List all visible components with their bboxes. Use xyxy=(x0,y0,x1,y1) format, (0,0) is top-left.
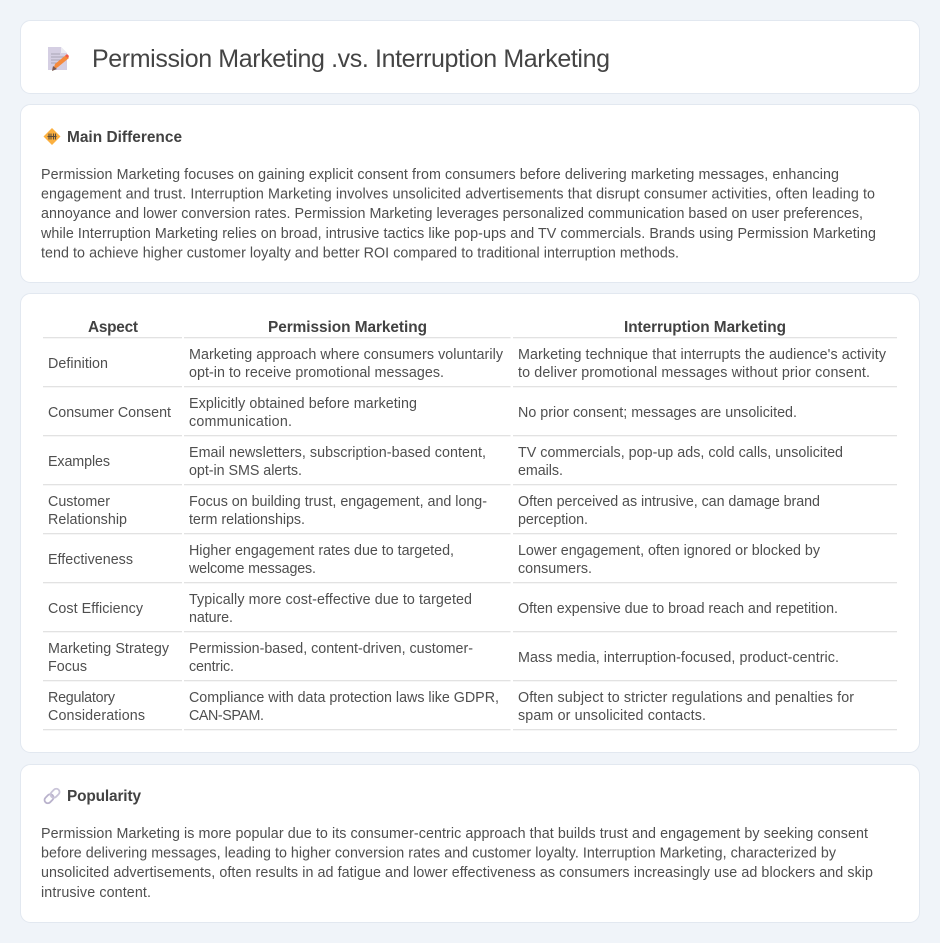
panel: popularity xyxy=(20,764,920,922)
table row: marketing strategy focus: Permission-based, content-driven, customer- xyxy=(189,641,473,657)
text block: main difference body: Permission Marketing focuses on gaining explicit consent from consumers before delivering marketing messages, enhancing xyxy=(41,167,839,183)
table row: effectiveness: welcome messages. xyxy=(188,561,316,577)
panel: comparison table xyxy=(20,294,920,752)
icon: chain link xyxy=(43,787,61,805)
table row: consumer consent xyxy=(43,396,897,436)
text block: main difference body xyxy=(40,167,876,261)
table row: marketing strategy focus: Marketing Strategy xyxy=(48,641,170,657)
text block: popularity body: unsolicited advertisements, often results in ad fatigue and lower effectiveness as consumers increasingly use ad blockers and skip xyxy=(41,865,873,881)
table row: effectiveness: Effectiveness xyxy=(48,552,133,568)
table row: customer relationship xyxy=(43,494,897,534)
table header row: Aspect xyxy=(88,319,138,336)
table row: regulatory considerations: Often subject to stricter regulations and penalties for xyxy=(518,690,854,706)
table row: consumer consent: Explicitly obtained before marketing xyxy=(189,396,417,412)
table header row: Interruption Marketing xyxy=(624,319,786,336)
table row: definition xyxy=(43,347,897,387)
text block: popularity body xyxy=(41,826,873,901)
table row: cost efficiency xyxy=(43,592,897,632)
table row: customer relationship: perception. xyxy=(518,512,588,528)
table row: examples: Examples xyxy=(48,454,110,470)
table row: definition: Definition xyxy=(48,356,108,372)
table row: definition: Marketing approach where consumers voluntarily xyxy=(189,347,504,363)
table header row: Permission Marketing xyxy=(268,319,427,336)
table row: regulatory considerations xyxy=(43,690,897,730)
table row: customer relationship: Customer xyxy=(48,494,110,510)
table row: customer relationship: Relationship xyxy=(48,512,127,528)
panel: title header xyxy=(20,20,920,94)
table row: examples: opt-in SMS alerts. xyxy=(189,463,302,479)
table row: regulatory considerations: CAN-SPAM. xyxy=(189,708,264,724)
text block: main difference body: annoyance and lower conversion rates. Permission Marketing leverages personalized communication based on user preferences, xyxy=(41,206,863,222)
table row: cost efficiency: Cost Efficiency xyxy=(48,601,144,617)
table row: definition: Marketing technique that interrupts the audience's activity xyxy=(518,347,887,363)
table row: consumer consent: No prior consent; messages are unsolicited. xyxy=(518,405,797,421)
table row: consumer consent: communication. xyxy=(189,414,292,430)
text block: main difference body: tend to achieve higher customer loyalty and better ROI compared to traditional interruption methods. xyxy=(41,245,679,261)
title: Permission Marketing .vs. Interruption Marketing xyxy=(92,45,610,73)
table row: regulatory considerations: Considerations xyxy=(48,708,145,724)
table row: cost efficiency: Typically more cost-effective due to targeted xyxy=(189,592,472,608)
table row: effectiveness: consumers. xyxy=(518,561,592,577)
table row: examples: emails. xyxy=(518,463,563,479)
table row: definition: opt-in to receive promotional messages. xyxy=(189,365,444,381)
panel: main difference xyxy=(20,104,920,282)
table row: consumer consent: Consumer Consent xyxy=(48,405,171,421)
table row: effectiveness: Lower engagement, often ignored or blocked by xyxy=(518,543,821,559)
table row: regulatory considerations: Regulatory xyxy=(48,690,116,706)
heading: main difference: Main Difference xyxy=(67,129,182,146)
table row: customer relationship: term relationships. xyxy=(189,512,305,528)
table row: cost efficiency: nature. xyxy=(189,610,233,626)
table row: customer relationship: Often perceived as intrusive, can damage brand xyxy=(518,494,820,510)
table row: effectiveness xyxy=(43,543,897,583)
table row: examples: Email newsletters, subscription-based content, xyxy=(189,445,486,461)
table row: marketing strategy focus xyxy=(43,641,897,681)
table row: marketing strategy focus: Mass media, interruption-focused, product-centric. xyxy=(518,650,839,666)
icon: document with pencil xyxy=(48,47,69,71)
table row: customer relationship: Focus on building trust, engagement, and long- xyxy=(189,494,487,510)
table row: examples: TV commercials, pop-up ads, cold calls, unsolicited xyxy=(518,445,843,461)
table row: regulatory considerations: spam or unsolicited contacts. xyxy=(518,708,706,724)
table row: regulatory considerations: Compliance with data protection laws like GDPR, xyxy=(189,690,499,706)
text block: popularity body: intrusive content. xyxy=(41,885,151,901)
text block: popularity body: before delivering messages, leading to higher conversion rates and customer loyalty. Interruption Marketing, characterized by xyxy=(41,846,837,862)
table row: effectiveness: Higher engagement rates due to targeted, xyxy=(189,543,454,559)
table row: definition: to deliver promotional messages without prior consent. xyxy=(518,365,870,381)
icon: warning diamond xyxy=(44,128,60,145)
text block: popularity body: Permission Marketing is more popular due to its consumer-centric approach that builds trust and engagement by seeking consent xyxy=(41,826,868,842)
heading: popularity: Popularity xyxy=(67,788,141,805)
table row: marketing strategy focus: centric. xyxy=(189,659,234,675)
text block: main difference body: while Interruption Marketing relies on broad, intrusive tactics like pop-ups and TV commercials. Brands using Permission Marketing xyxy=(40,226,876,242)
table header row xyxy=(43,319,897,338)
table row: cost efficiency: Often expensive due to broad reach and repetition. xyxy=(518,601,838,617)
text block: main difference body: engagement and trust. Interruption Marketing involves unsolicited advertisements that disrupt consumer activities, often leading to xyxy=(41,187,875,203)
table row: examples xyxy=(43,445,897,485)
table row: marketing strategy focus: Focus xyxy=(48,659,87,675)
